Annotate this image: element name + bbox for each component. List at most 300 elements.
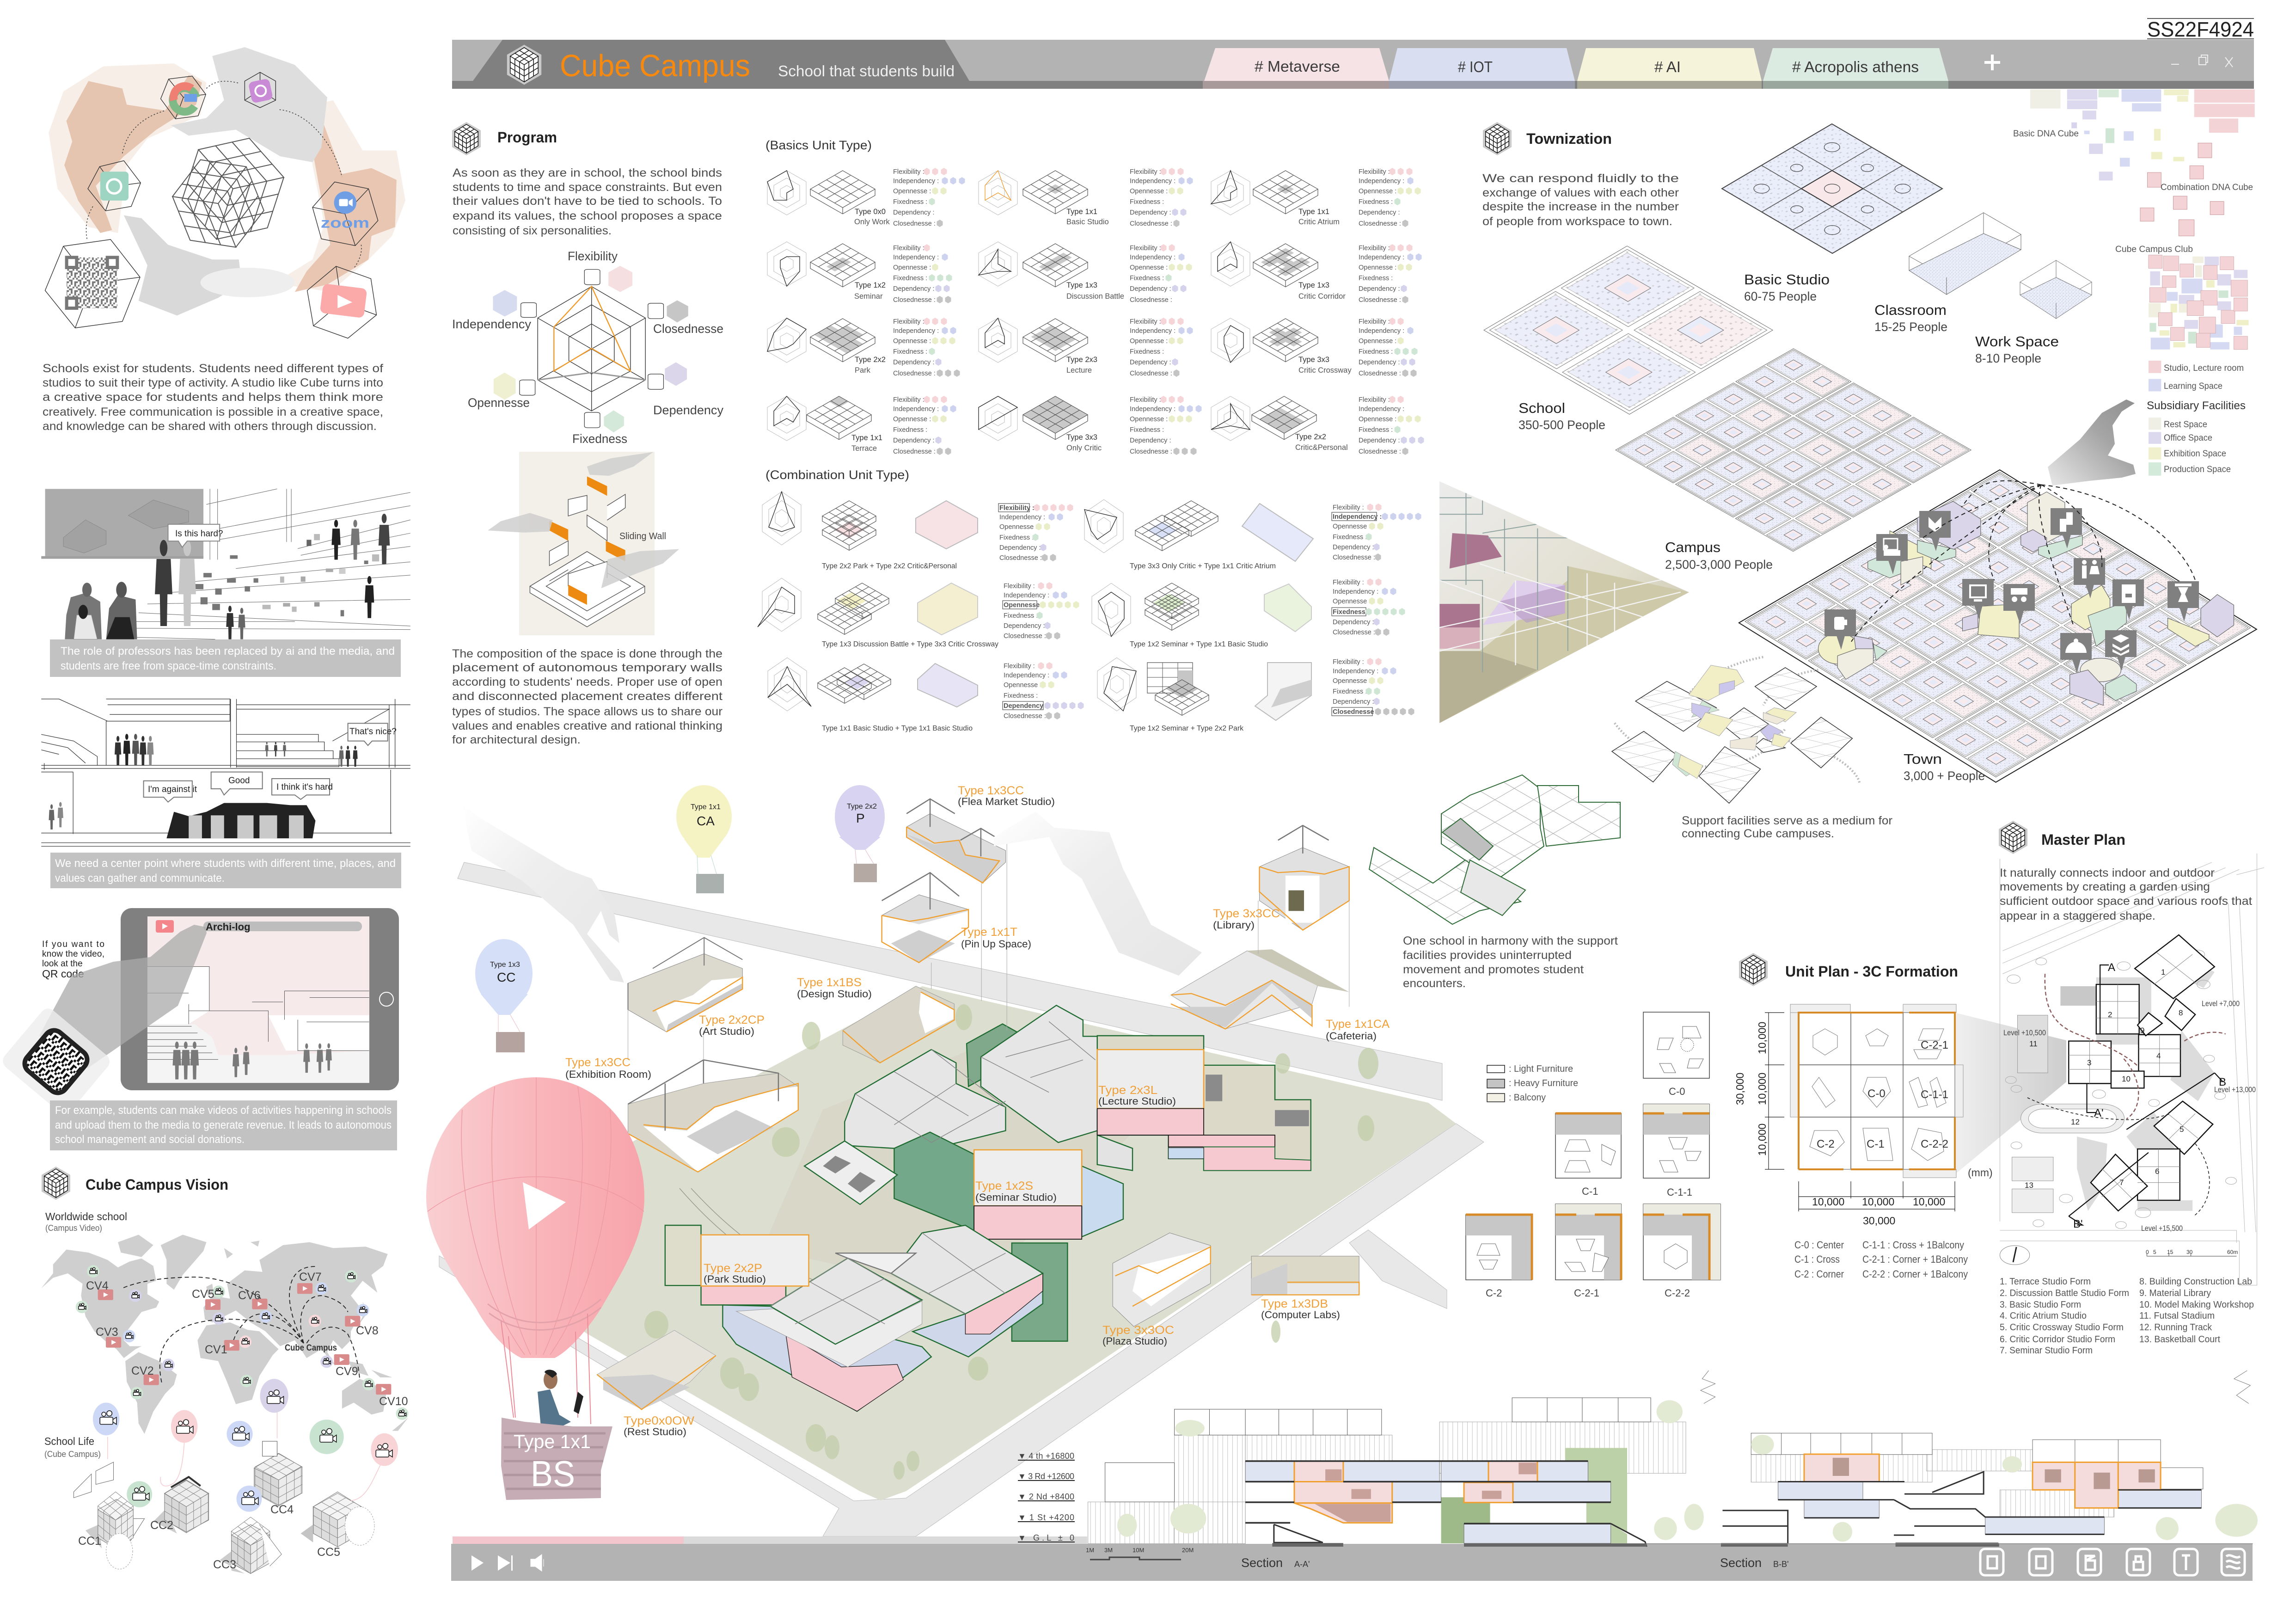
- dimension values: 10,000: [1756, 1073, 1768, 1105]
- basics unit labels: Type 0x0: [855, 208, 886, 216]
- master plan annotations: 12: [2071, 1118, 2080, 1126]
- caption: example: and upload them to the media to generate revenue. It leads to autonomous: [55, 1119, 392, 1131]
- caption: professors: The role of professors has been replaced by ai and the media, and: [61, 645, 395, 657]
- dimension values: [1734, 1022, 1993, 1227]
- attribute rating: type 1x3 discussion battle: Dependency :: [1130, 285, 1171, 293]
- orange sliding walls: [550, 476, 625, 605]
- DNA and legend labels: [2013, 129, 2253, 474]
- level markers: ▼ 3 Rd +12600: [1018, 1472, 1074, 1481]
- heading: cube campus vision: Cube Campus Vision: [86, 1176, 228, 1193]
- intro paragraph: Schools exist for students. Students need different types of: [43, 362, 383, 375]
- small plan C-0: C-0: [1669, 1086, 1685, 1097]
- attribute rating: type 3x3 only critic: [1130, 396, 1202, 455]
- harmony text: facilities provides uninterrupted: [1403, 949, 1572, 962]
- ghost professor: [178, 540, 196, 626]
- heading: combination unit type: (Combination Unit Type): [765, 468, 909, 482]
- aerial unit labels: [565, 784, 1390, 1438]
- slabs and stair frames: [1722, 1472, 2201, 1543]
- DNA cube swatches: [2030, 89, 2255, 476]
- aerial unit labels: Type 1x1CA: [1326, 1018, 1390, 1031]
- support facilities text: [1682, 814, 1892, 840]
- caption: professors: students are free from space-time constraints.: [61, 660, 276, 672]
- map labels: [78, 1271, 408, 1571]
- bubble texts: I think it's hard: [276, 782, 333, 792]
- small balloon: CC: Type 1x3: [490, 961, 520, 969]
- scale diagram: school: [1484, 246, 1773, 414]
- floating unit: design studio: [843, 986, 954, 1063]
- master plan annotations: 60m: [2227, 1249, 2238, 1255]
- townization paragraph: [1482, 172, 1679, 228]
- aerial unit labels: (Lecture Studio): [1098, 1095, 1176, 1107]
- basics unit labels: Park: [855, 366, 871, 375]
- master plan list left: 4. Critic Atrium Studio: [2000, 1311, 2087, 1321]
- basics unit labels: Critic Crossway: [1298, 366, 1352, 375]
- scale labels: 2,500-3,000 People: [1665, 558, 1773, 571]
- section titles: B-B': [1773, 1560, 1788, 1569]
- combination rating: independency: Dependency :: [1333, 544, 1374, 551]
- right hand over aerial: [994, 811, 1202, 976]
- DNA and legend labels: Basic DNA Cube: [2013, 129, 2079, 139]
- basics unit labels: Type 2x2: [1295, 433, 1326, 441]
- map labels: CC4: [270, 1503, 294, 1516]
- master plan annotations: 5: [2153, 1249, 2156, 1255]
- combination rating: openness: Closednesse :: [1004, 633, 1046, 640]
- green wall: [894, 1132, 974, 1231]
- attribute rating: type 2x2 park: Flexibility :: [893, 318, 925, 326]
- combination rating: dependency: Opennesse :: [1004, 682, 1041, 689]
- combination rating: flexibility: Independency :: [999, 514, 1045, 521]
- school life label: (Cube Campus): [44, 1450, 101, 1459]
- map labels: Cube Campus: [285, 1343, 337, 1353]
- town pin icons: [1825, 508, 2199, 673]
- pink studios with orange frame: [1804, 1454, 2161, 1508]
- project code: SS22F4924: [2147, 18, 2254, 41]
- attribute rating: type 3x3 critic crossway: [1359, 318, 1417, 377]
- combination rating: openness: Dependency :: [1004, 622, 1045, 630]
- combination captions: Type 2x2 Park + Type 2x2 Critic&Personal: [822, 562, 957, 570]
- master plan annotations: 11: [2029, 1039, 2038, 1048]
- DNA and legend labels: Studio, Lecture room: [2164, 363, 2244, 373]
- section B-B: [1117, 1370, 2258, 1547]
- master plan drawing: [2000, 854, 2264, 1285]
- combination unit diagrams: [758, 492, 1313, 720]
- town label: [1904, 751, 1985, 783]
- unit plan key: C-1 : Cross: [1794, 1253, 1840, 1265]
- route arrows: [122, 1266, 360, 1385]
- DNA and legend labels: Learning Space: [2164, 381, 2223, 391]
- master plan annotations: A: [2108, 961, 2115, 974]
- dimension values: 30,000: [1734, 1073, 1746, 1105]
- large camera balloons: [93, 1379, 398, 1512]
- unit plan key: C-2 : Corner: [1794, 1268, 1844, 1280]
- section titles: A-A': [1294, 1560, 1310, 1569]
- room labels: C-0: [1867, 1087, 1886, 1100]
- attribute rating: type 2x2 park: Dependency :: [893, 359, 934, 366]
- seminar studio volume: [974, 1150, 1082, 1239]
- attribute rating: type 2x2 critic personal: Flexibility :: [1359, 396, 1390, 404]
- town label: Town: [1904, 751, 1942, 767]
- basket text: BS: [531, 1453, 575, 1494]
- tab: iot: # IOT: [1458, 58, 1493, 75]
- DNA and legend labels: Rest Space: [2164, 420, 2207, 430]
- tablet screen: [147, 916, 369, 1083]
- skin hand right: [295, 114, 397, 292]
- attribute rating: type 1x1 terrace: Opennesse :: [893, 416, 931, 423]
- combination rating: dependency: Closednesse :: [1004, 713, 1046, 720]
- attribute rating: type 1x3 critic corridor: Independency :: [1359, 254, 1404, 261]
- basics unit labels: Basic Studio: [1066, 218, 1109, 226]
- dimensions: [1765, 1013, 1955, 1211]
- intro illustration: hands holding cube: [45, 47, 405, 338]
- basics unit labels: Type 1x2: [855, 281, 886, 289]
- section scale bar: 10M: [1133, 1547, 1144, 1554]
- master plan list left: 2. Discussion Battle Studio Form: [2000, 1288, 2129, 1298]
- DNA and legend labels: Combination DNA Cube: [2161, 183, 2253, 192]
- master plan annotations: 4: [2156, 1051, 2161, 1060]
- blue rooms: [1778, 1481, 2201, 1534]
- basics unit labels: Type 2x3: [1066, 356, 1097, 364]
- composition paragraph: and disconnected placement creates different: [452, 690, 722, 703]
- section titles: [1241, 1556, 1788, 1570]
- small plan C-2-2: C-2-2: [1665, 1287, 1690, 1299]
- room labels: [1817, 1039, 1948, 1150]
- map labels: CV10: [379, 1395, 408, 1408]
- cube B: [845, 1050, 1005, 1149]
- people on upper floor: [49, 734, 358, 829]
- icon: qr code: [67, 258, 117, 308]
- floating unit: pin up space: [882, 872, 968, 963]
- room labels: C-2-1: [1921, 1039, 1948, 1051]
- attribute rating: type 1x1 critic atrium: Closednesse :: [1359, 220, 1401, 227]
- master plan annotations: 15: [2167, 1249, 2174, 1255]
- heading: program: [452, 122, 557, 155]
- combination rating: independency: Flexibility :: [1333, 504, 1364, 511]
- attribute rating: type 2x2 critic personal: Opennesse :: [1359, 416, 1396, 423]
- aerial unit labels: (Library): [1213, 919, 1255, 931]
- map labels: CV1: [205, 1343, 227, 1356]
- composition paragraph: types of studios. The space allows us to share our: [452, 705, 722, 718]
- cube CC4: [254, 1441, 302, 1506]
- attribute rating: type 1x1 basic studio: Opennesse :: [1130, 188, 1168, 195]
- icon hexagons: [45, 72, 378, 338]
- unit plan key: C-1-1 : Cross + 1Balcony: [1862, 1239, 1964, 1251]
- lower pink base: [701, 1286, 786, 1305]
- large camera glyphs: [100, 1390, 392, 1505]
- attribute rating: type 0x0: [893, 168, 965, 227]
- personality icons: [520, 270, 663, 428]
- radars: [767, 171, 1250, 441]
- master plan paragraph: It naturally connects indoor and outdoor: [2000, 866, 2215, 879]
- furniture legend: : Light Furniture: [1509, 1064, 1573, 1074]
- floating unit: exhibition room: [628, 1060, 798, 1172]
- floating unit: plaza studio: [1113, 1233, 1211, 1327]
- combination rating: flexibility: Dependency :: [999, 544, 1041, 552]
- attribute rating: type 2x3 lecture: [1130, 318, 1193, 377]
- road lines: [2000, 854, 2264, 1285]
- combination rating: fixedness: Dependency :: [1333, 619, 1374, 626]
- basics unit labels: Lecture: [1066, 366, 1092, 375]
- aerial unit labels: Type 3x3OC: [1102, 1324, 1174, 1337]
- beige block: [665, 1225, 701, 1285]
- combination rating: flexibility: Opennesse :: [999, 523, 1037, 531]
- heading: unit plan: Unit Plan - 3C Formation: [1785, 963, 1958, 980]
- QR instruction text: QR code: [42, 968, 84, 980]
- program paragraph: students to time and space constraints. But even: [453, 181, 722, 194]
- attribute rating: type 1x1 terrace: Fixedness :: [893, 426, 927, 434]
- meeting table people: [166, 803, 315, 838]
- intro paragraph: creatively. Free communication is possible in a creative space,: [43, 406, 383, 418]
- intro paragraph: [43, 362, 383, 433]
- volume button: [531, 1554, 544, 1571]
- scale labels: School: [1518, 400, 1565, 416]
- map labels: CC1: [78, 1535, 101, 1548]
- dimension values: 30,000: [1863, 1215, 1895, 1227]
- green outlined campus cluster: [1369, 775, 1620, 924]
- unit plan key: [1794, 1239, 1968, 1280]
- cube D lower: [913, 1273, 1043, 1357]
- attribute rating: type 1x2 seminar: Dependency :: [893, 285, 934, 293]
- hand halos: [49, 63, 405, 292]
- DNA and legend labels: Office Space: [2164, 433, 2212, 443]
- attribute rating: type 0x0: Opennesse :: [893, 188, 931, 195]
- attribute rating: type 2x3 lecture: Dependency :: [1130, 359, 1171, 366]
- roof frames: [1751, 1433, 2203, 1489]
- basic DNA cubes: [2030, 89, 2255, 236]
- tablet: [39, 908, 399, 1090]
- icon: youtube: [320, 283, 367, 318]
- attribute rating: type 1x1 basic studio: Flexibility :: [1130, 168, 1161, 176]
- small plan C-2-1: C-2-1: [1574, 1287, 1599, 1299]
- section titles: Section: [1720, 1556, 1762, 1570]
- hatched facades: [1751, 1450, 2114, 1517]
- north marker: [2000, 1246, 2030, 1265]
- heading: unit plan: [1739, 953, 1958, 986]
- tab: acropolis athens: [1763, 48, 1948, 89]
- basics unit labels: Critic&Personal: [1295, 443, 1348, 452]
- scale diagram: work space: [2020, 260, 2092, 319]
- radar value shape: [554, 287, 631, 371]
- attribute rating: type 3x3 only critic: Closednesse :: [1130, 448, 1172, 455]
- aerial unit labels: (Park Studio): [704, 1273, 766, 1285]
- combination rating: closedness: Flexibility :: [1333, 658, 1364, 666]
- plan scale bar: [2147, 1253, 2236, 1256]
- worldwide school label: Worldwide school: [45, 1210, 127, 1223]
- scale diagram: classroom: [1909, 213, 2021, 295]
- combination type 1x2 + 2x2: [1147, 663, 1311, 720]
- attribute rating: type 2x2 park: Fixedness :: [893, 348, 927, 356]
- dimension values: 10,000: [1756, 1124, 1768, 1156]
- aerial unit labels: Type 1x2S: [975, 1180, 1033, 1192]
- townization paragraph: exchange of values with each other: [1482, 186, 1679, 199]
- dimension values: 10,000: [1913, 1196, 1945, 1208]
- section scale bar: 20M: [1182, 1547, 1194, 1554]
- section cut lines: [2069, 965, 2223, 1225]
- dotted connection arcs: [86, 81, 361, 268]
- attribute rating: type 3x3 only critic: Dependency :: [1130, 437, 1171, 444]
- basics unit labels: Type 1x3: [1066, 281, 1097, 289]
- play button: [471, 1555, 484, 1571]
- bottom player progress bar: [453, 1536, 1087, 1544]
- attribute rating: type 3x3 critic crossway: Dependency :: [1359, 359, 1400, 366]
- floating unit: art studio: [628, 938, 742, 1032]
- combination rating: dependency: Flexibility :: [1004, 663, 1035, 670]
- screen street view: [147, 967, 369, 1083]
- tab: ai: [1577, 48, 1762, 89]
- basics unit labels: Critic Atrium: [1298, 218, 1340, 226]
- dimension values: 10,000: [1862, 1196, 1894, 1208]
- attribute rating: type 2x2 critic personal: Closednesse :: [1359, 448, 1401, 455]
- floating unit: rest studio: [597, 1330, 716, 1409]
- master plan annotations: 3: [2087, 1058, 2091, 1067]
- attribute rating: type 1x1 basic studio: [1130, 168, 1193, 227]
- sketch: gathering hall: [41, 699, 410, 846]
- building footprints: [2069, 935, 2215, 1211]
- video play buttons: [98, 1283, 391, 1395]
- green court: [1012, 1243, 1067, 1341]
- aerial unit labels: Type0x0OW: [624, 1414, 694, 1427]
- combination rating: openness: [1003, 582, 1079, 640]
- attribute rating: type 2x2 park: [893, 318, 960, 377]
- attribute rating: type 0x0: Flexibility :: [893, 168, 925, 176]
- master plan annotations: B': [2073, 1218, 2083, 1230]
- aerial unit labels: (Flea Market Studio): [958, 796, 1055, 807]
- master plan annotations: [2003, 961, 2256, 1255]
- gloved hands: [488, 452, 679, 588]
- combination rating: independency: Independency :: [1333, 513, 1382, 521]
- unit plan key: C-2-1 : Corner + 1Balcony: [1862, 1253, 1968, 1265]
- gray hand top: [171, 47, 327, 162]
- basics unit labels: Critic Corridor: [1298, 292, 1346, 301]
- finger hand: [2048, 399, 2136, 485]
- attribute rating: type 1x3 discussion battle: [1130, 244, 1192, 304]
- master plan annotations: 13: [2025, 1181, 2033, 1190]
- combination rating: openness: Opennesse :: [1004, 602, 1044, 609]
- small plan C-1-1: [1643, 1104, 1709, 1198]
- combination rating: fixedness: [1332, 578, 1405, 636]
- master plan paragraph: [2000, 866, 2252, 922]
- heading: master plan: Master Plan: [2041, 831, 2125, 848]
- room labels: C-1: [1867, 1138, 1885, 1150]
- combination rating: fixedness: Flexibility :: [1333, 579, 1364, 586]
- basics unit labels: Type 1x3: [1298, 281, 1329, 289]
- support facilities text: connecting Cube campuses.: [1682, 827, 1834, 840]
- master plan annotations: 2: [2108, 1010, 2112, 1019]
- attribute rating: type 2x2 critic personal: Fixedness :: [1359, 426, 1393, 434]
- aerial unit labels: Type 1x3CC: [958, 784, 1024, 797]
- unit plan key: C-2-2 : Corner + 1Balcony: [1862, 1268, 1968, 1280]
- map labels: CV4: [86, 1279, 109, 1292]
- master plan annotations: Level +13,000: [2214, 1085, 2256, 1094]
- attribute rating: type 2x2 park: Closednesse :: [893, 370, 936, 377]
- combination type 2x2 + 2x2: [818, 501, 978, 550]
- aerial unit labels: Type 2x2P: [704, 1262, 762, 1275]
- master plan list right: 10. Model Making Workshop: [2139, 1300, 2254, 1310]
- combination rating: independency: [1332, 504, 1421, 561]
- attribute rating: type 2x3 lecture: Fixedness :: [1130, 348, 1164, 356]
- floating unit: flea market studio: [906, 799, 1005, 883]
- caption: example: school management and social donations.: [55, 1133, 245, 1146]
- scale labels: Work Space: [1975, 333, 2059, 350]
- map labels: CV6: [238, 1289, 261, 1302]
- aerial unit labels: Type 3x3CC: [1213, 907, 1280, 920]
- world map: [41, 1235, 408, 1573]
- aerial unit labels: (Exhibition Room): [565, 1069, 651, 1080]
- combination captions: Type 1x2 Seminar + Type 2x2 Park: [1130, 725, 1243, 732]
- smart watch with QR code: [0, 1005, 113, 1117]
- attribute rating: type 2x2 critic personal: Independency :: [1359, 406, 1404, 413]
- heading: master plan: [1999, 821, 2125, 854]
- radar labels: Opennesse: [468, 396, 530, 410]
- grey ground planes: [2060, 949, 2215, 1211]
- blue rooms: [1245, 1461, 1611, 1543]
- combination rating: closedness: Independency :: [1333, 668, 1378, 675]
- combination captions: [822, 562, 1276, 732]
- basics unit labels: Only Critic: [1066, 444, 1102, 452]
- level markers: [1018, 1451, 1075, 1542]
- combination radars: [758, 492, 1136, 711]
- master plan list left: 3. Basic Studio Form: [2000, 1300, 2081, 1310]
- facility volumes: [1818, 492, 2234, 706]
- caption: center point: We need a center point where students with different time, places, and: [55, 857, 396, 870]
- section scale bar: 3M: [1104, 1547, 1113, 1554]
- DNA and legend labels: Production Space: [2164, 465, 2231, 474]
- unit plan drawing: [1734, 1004, 1993, 1227]
- tree marks: [2005, 950, 2236, 1229]
- attribute rating: type 0x0: Closednesse :: [893, 220, 936, 227]
- harmony text: encounters.: [1403, 977, 1466, 990]
- map labels: CC2: [150, 1519, 173, 1532]
- combination rating: independency: Fixedness :: [1333, 534, 1367, 541]
- furniture legend: [1487, 1064, 1578, 1103]
- combination rating: fixedness: Opennesse :: [1333, 598, 1371, 605]
- room labels: C-2: [1817, 1138, 1835, 1150]
- attribute rating: type 1x1 terrace: Dependency :: [893, 437, 934, 444]
- attribute rating: type 2x3 lecture: Opennesse :: [1130, 338, 1168, 345]
- campus club swatches: [2149, 255, 2249, 350]
- basics unit labels: Type 1x1: [1066, 208, 1097, 216]
- composition paragraph: according to students' needs. Proper use of open: [452, 676, 722, 688]
- radar labels: [452, 249, 723, 446]
- attribute rating: type 0x0: Independency :: [893, 178, 939, 185]
- attribute rating: type 1x1 critic atrium: Opennesse :: [1359, 188, 1396, 195]
- bubble: is this hard: [168, 524, 220, 547]
- combination type 1x1 + 1x1: [813, 664, 978, 707]
- furniture legend: : Balcony: [1509, 1093, 1546, 1103]
- cube CC5: [301, 1492, 374, 1547]
- contour marks: [1701, 1370, 2250, 1403]
- furniture legend: : Heavy Furniture: [1509, 1078, 1578, 1088]
- QR instruction text: look at the: [42, 959, 83, 969]
- scale labels: 15-25 People: [1874, 320, 1947, 334]
- master plan annotations: 6: [2155, 1167, 2159, 1176]
- radar labels: Flexibility: [568, 249, 618, 263]
- heading: program: Program: [497, 129, 557, 146]
- master plan annotations: Level +10,500: [2003, 1028, 2046, 1037]
- home button: [380, 992, 393, 1006]
- section A-A: [1088, 1398, 1686, 1547]
- combination rating: flexibility: [998, 504, 1073, 562]
- combination rating: dependency: Independency :: [1004, 672, 1049, 679]
- vertical leader lines: [628, 843, 1349, 1060]
- balloon strings: [108, 1412, 380, 1501]
- master plan annotations: Level +7,000: [2202, 999, 2240, 1008]
- small plan C-1: [1555, 1113, 1621, 1197]
- basics unit labels: Type 1x1: [1298, 208, 1329, 216]
- green roof: [967, 1024, 1027, 1087]
- master plan annotations: 5: [2180, 1125, 2184, 1134]
- aerial unit labels: (Plaza Studio): [1102, 1335, 1167, 1347]
- skin hand left: [64, 75, 202, 233]
